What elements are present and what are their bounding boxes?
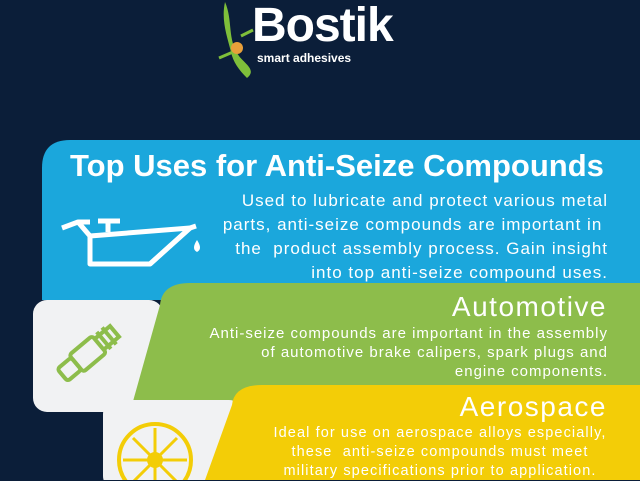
logo: Bostik	[252, 0, 393, 52]
title: Top Uses for Anti-Seize Compounds	[70, 148, 604, 183]
panel: automotive green	[130, 283, 640, 412]
heading: Aerospace: Aerospace	[460, 391, 607, 422]
text: aerospace: these anti-seize compounds must meet	[292, 444, 588, 460]
panel: aerospace yellow	[205, 385, 640, 480]
text: aerospace	[274, 425, 606, 479]
text: aerospace: Ideal for use on aerospace alloys especially,	[274, 425, 606, 441]
intro text: into top anti-seize compound uses.	[311, 263, 608, 282]
intro text: parts, anti-seize compounds are important in	[223, 215, 602, 234]
intro text	[223, 191, 608, 282]
intro text: Used to lubricate and protect various metal	[242, 191, 608, 210]
icon: turbine	[119, 424, 191, 481]
card: turbine	[103, 400, 243, 481]
text: automotive	[209, 325, 608, 380]
text: aerospace: military specifications prior to application.	[283, 463, 597, 479]
heading: Automotive: Automotive	[452, 291, 607, 322]
intro text: the product assembly process. Gain insight	[235, 239, 608, 258]
card: spark plug	[33, 300, 163, 412]
text: automotive: Anti-seize compounds are important in the assembly	[209, 325, 608, 342]
logo	[218, 0, 394, 78]
panel: intro blue	[42, 140, 640, 300]
logo: smart adhesives	[257, 51, 351, 65]
text: automotive: of automotive brake calipers, spark plugs and	[261, 344, 608, 361]
icon: oil can	[62, 221, 196, 264]
icon: spark plug	[55, 323, 122, 384]
text: automotive: engine components.	[455, 363, 608, 380]
